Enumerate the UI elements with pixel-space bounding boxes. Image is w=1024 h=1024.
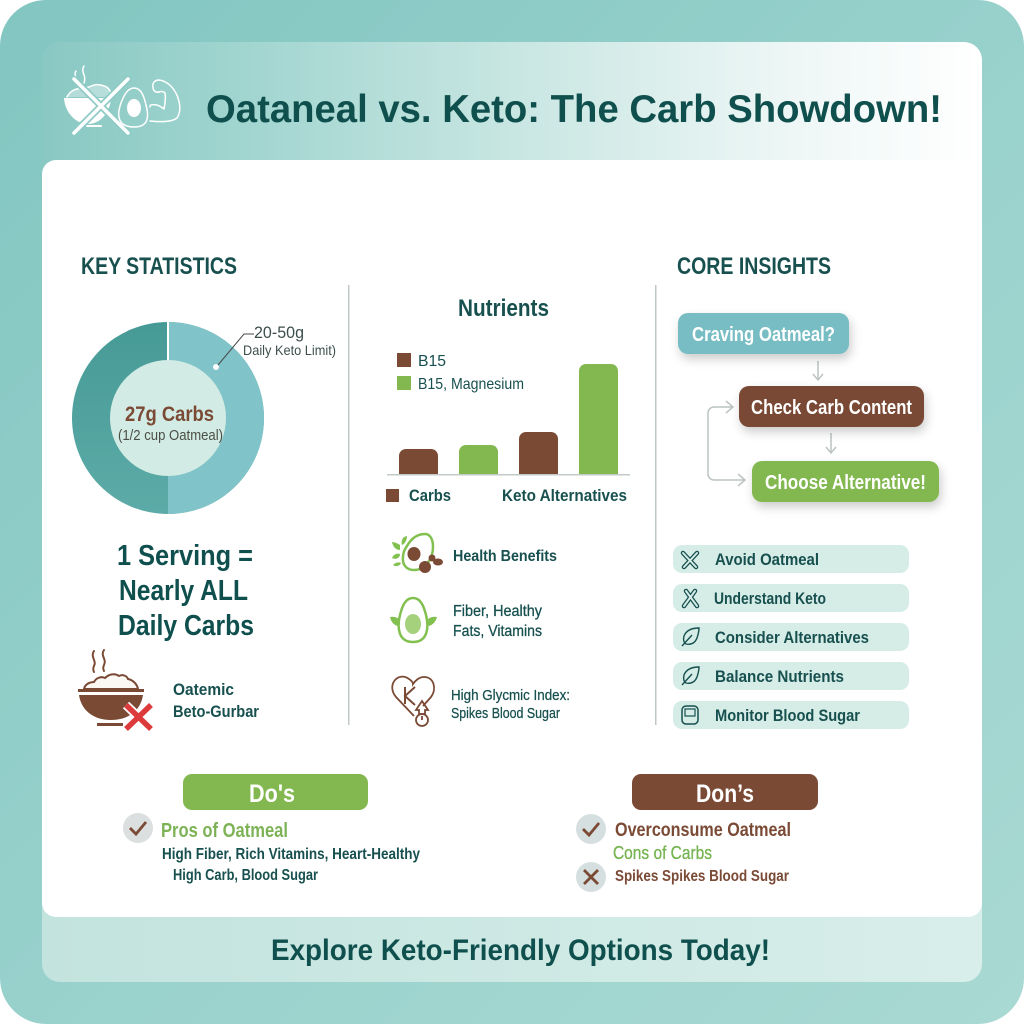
title: Oataneal vs. Keto: The Carb Showdown! xyxy=(206,88,942,131)
banner: don's: Don’s xyxy=(696,780,754,808)
item: consider alternatives xyxy=(673,623,909,651)
heading: key statistics: KEY STATISTICS xyxy=(81,253,237,280)
item: understand keto: Understand Keto xyxy=(714,589,826,608)
bar chart: B15, Magnesium xyxy=(418,376,524,393)
icon: check xyxy=(123,813,153,843)
box: craving oatmeal: Craving Oatmeal? xyxy=(692,324,835,346)
box: craving oatmeal xyxy=(678,313,849,354)
text: pros detail xyxy=(162,846,420,884)
bar chart xyxy=(386,353,630,505)
banner: do's: Do's xyxy=(249,780,295,808)
donut chart: 20-50g xyxy=(254,323,304,342)
icon: cross xyxy=(576,862,606,892)
donut chart: (1/2 cup Oatmeal) xyxy=(118,427,223,444)
banner: don's xyxy=(632,774,818,810)
item: avoid oatmeal xyxy=(673,545,909,573)
text: high glycemic index xyxy=(451,688,570,722)
item: understand keto xyxy=(673,584,909,612)
text: pros of oatmeal: Pros of Oatmeal xyxy=(161,820,288,842)
big statement xyxy=(117,540,254,642)
icon: heart with K and timer xyxy=(392,677,434,726)
icon: avocado with nuts xyxy=(392,534,443,573)
item: balance nutrients: Balance Nutrients xyxy=(715,667,844,686)
footer call to action: Explore Keto-Friendly Options Today! xyxy=(271,934,770,967)
box: check carb content: Check Carb Content xyxy=(751,397,912,419)
heading: nutrients: Nutrients xyxy=(458,295,549,322)
bar chart: B15 xyxy=(418,353,446,370)
text: fiber, fats, vitamins: Fiber, Healthy xyxy=(453,603,542,620)
oatmeal label xyxy=(173,680,259,721)
panel: don'ts xyxy=(576,774,818,892)
item: monitor blood sugar: Monitor Blood Sugar xyxy=(715,706,860,725)
item: avoid oatmeal: Avoid Oatmeal xyxy=(715,550,819,569)
item: consider alternatives: Consider Alternatives xyxy=(715,628,869,647)
divider right xyxy=(655,285,656,725)
oatmeal label: Beto-Gurbar xyxy=(173,702,259,721)
oatmeal label: Oatemic xyxy=(173,680,234,699)
text: pros detail: High Fiber, Rich Vitamins, Heart-Healthy xyxy=(162,846,420,863)
bar chart: Keto Alternatives xyxy=(502,486,627,505)
text: fiber, fats, vitamins xyxy=(453,603,542,640)
item: monitor blood sugar xyxy=(673,701,909,729)
text: cons of carbs: Cons of Carbs xyxy=(613,843,712,863)
text: spikes blood sugar: Spikes Spikes Blood Sugar xyxy=(615,868,789,885)
panel: core insights xyxy=(673,253,939,729)
donut chart: Daily Keto Limit) xyxy=(243,342,336,358)
item: balance nutrients xyxy=(673,662,909,690)
box: choose alternative xyxy=(752,461,939,502)
donut chart: 27g Carbs xyxy=(125,403,214,426)
big statement: 1 Serving = xyxy=(117,540,253,572)
banner: do's xyxy=(183,774,368,810)
text: health benefits: Health Benefits xyxy=(453,548,557,565)
text: high glycemic index: Spikes Blood Sugar xyxy=(451,706,560,722)
heading: core insights: CORE INSIGHTS xyxy=(677,253,831,280)
icon: crossed-out bowl, avocado and muscle xyxy=(64,66,180,133)
donut chart xyxy=(72,322,336,514)
text: fiber, fats, vitamins: Fats, Vitamins xyxy=(453,623,542,640)
big statement: Daily Carbs xyxy=(118,610,254,642)
bar chart: Carbs xyxy=(409,486,451,505)
big statement: Nearly ALL xyxy=(119,575,248,607)
insight list xyxy=(673,545,909,729)
panel: do's xyxy=(123,774,420,884)
text: overconsume oatmeal: Overconsume Oatmeal xyxy=(615,820,791,841)
box: check carb content xyxy=(739,386,924,427)
arrows xyxy=(708,361,836,486)
icon: check xyxy=(576,814,606,844)
icon: oatmeal bowl with red cross xyxy=(78,650,151,729)
divider left xyxy=(348,285,350,725)
icon: avocado xyxy=(390,598,437,642)
box: choose alternative: Choose Alternative! xyxy=(765,472,926,494)
panel: key statistics xyxy=(72,253,336,729)
panel: nutrients xyxy=(386,295,630,726)
flowchart xyxy=(678,313,939,502)
text: high glycemic index: High Glycmic Index: xyxy=(451,688,570,704)
text: pros detail: High Carb, Blood Sugar xyxy=(173,867,318,884)
